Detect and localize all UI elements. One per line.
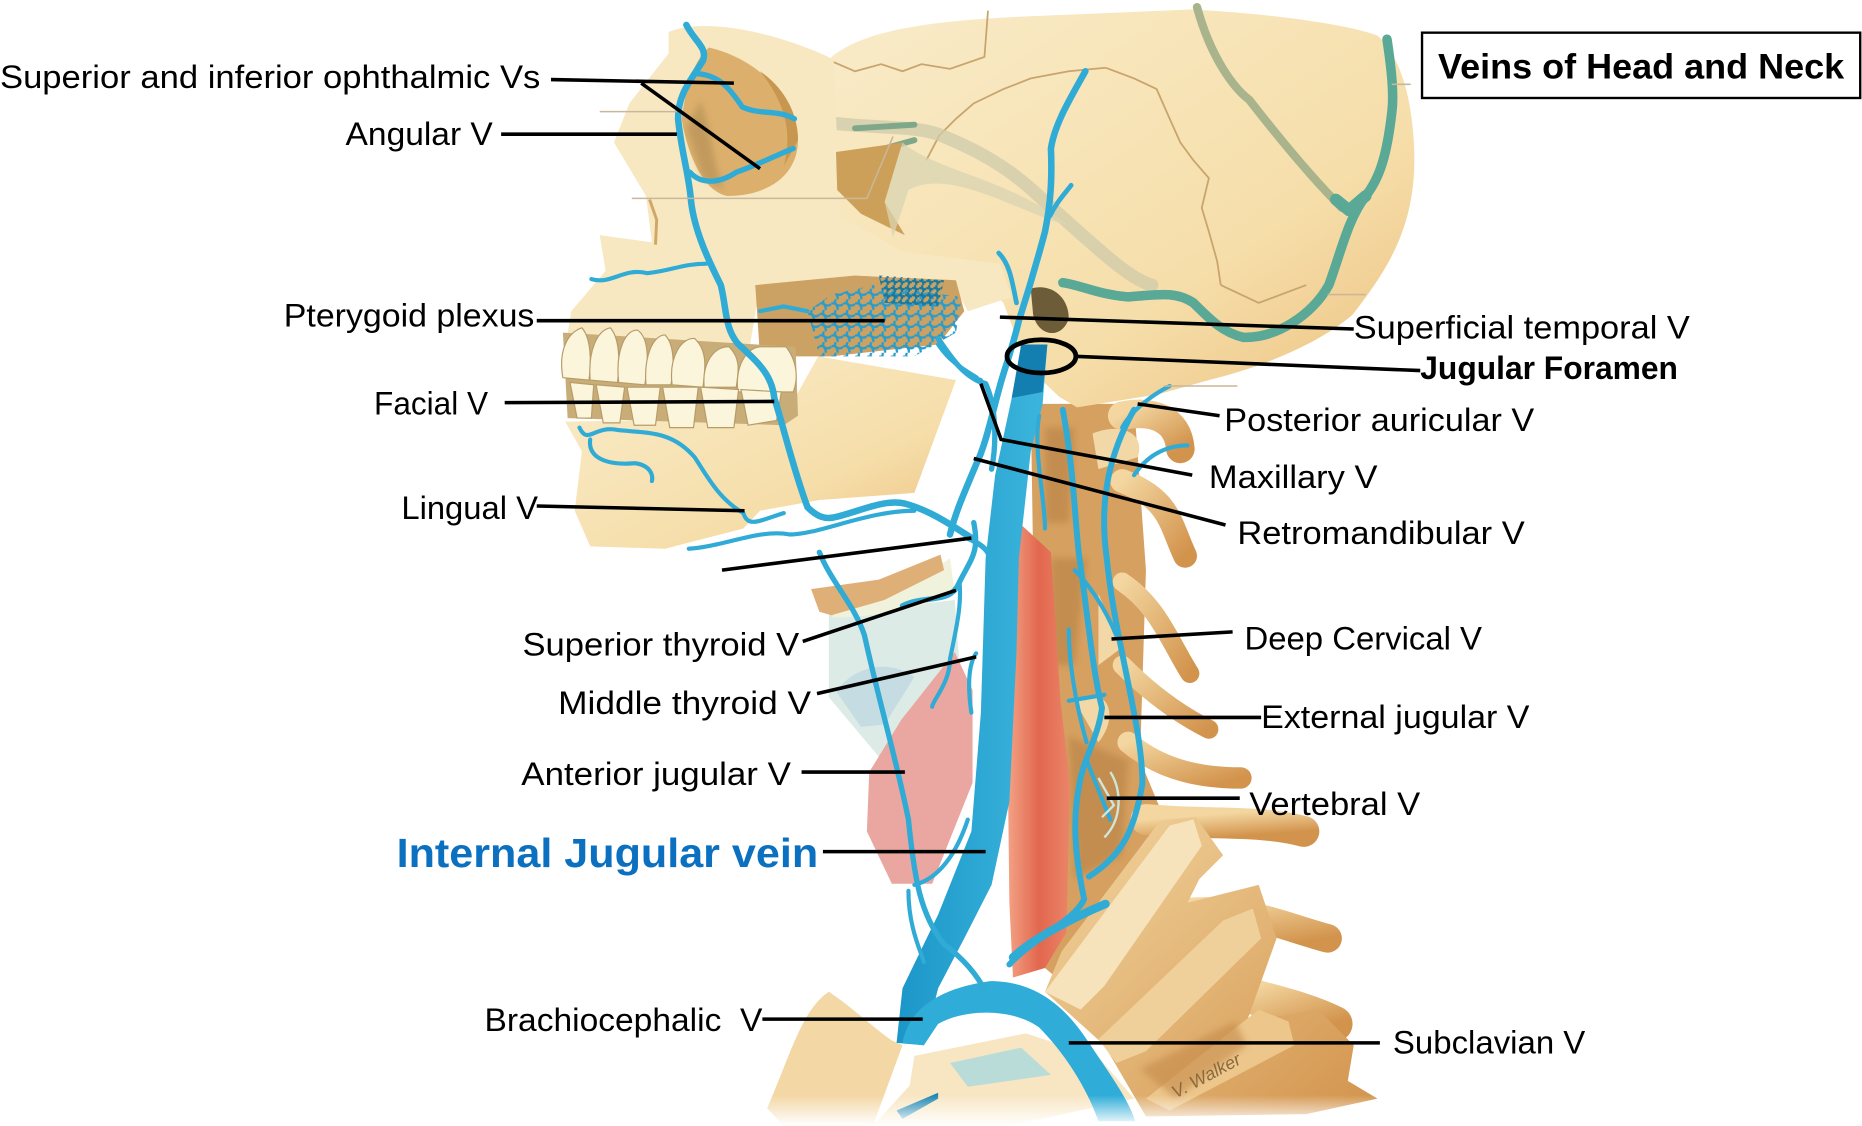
skull cranium <box>819 10 1414 407</box>
label: pterygoid plexus: Pterygoid plexus <box>284 298 534 334</box>
vertebrae and ribs <box>1024 404 1378 1116</box>
ear canal and base of skull <box>1031 287 1069 333</box>
facial and angular veins <box>678 25 974 539</box>
label: facial vein: Facial V <box>374 386 489 422</box>
label: lingual vein <box>401 490 745 526</box>
label: posterior auricular vein: Posterior auricular V <box>1224 402 1535 438</box>
label: subclavian vein: Subclavian V <box>1393 1025 1586 1061</box>
clavicle and sternum <box>767 992 1134 1126</box>
label: maxillary vein: Maxillary V <box>1209 459 1378 495</box>
thyroid gland <box>867 652 973 884</box>
label: lingual vein: Lingual V <box>401 490 539 526</box>
leader: unlabelled line <box>722 538 971 570</box>
label: angular vein: Angular V <box>346 116 493 152</box>
internal jugular vein <box>897 344 1047 1045</box>
fade at bottom edge <box>736 1095 1401 1126</box>
skull face <box>564 26 1012 356</box>
label: jugular foramen with ring marker: Jugular Foramen <box>1420 350 1678 386</box>
label: internal jugular vein: Internal Jugular vein <box>397 830 818 876</box>
mandible <box>565 356 956 549</box>
cranial sinuses <box>836 7 1393 337</box>
vertebral vein loop <box>1098 772 1119 837</box>
label: superficial temporal vein <box>1000 310 1690 346</box>
label: middle thyroid vein: Middle thyroid V <box>558 685 812 721</box>
label: maxillary vein <box>981 384 1378 495</box>
label: vertebral vein: Vertebral V <box>1249 786 1421 822</box>
pterygoid plexus <box>760 276 981 380</box>
label: anterior jugular vein: Anterior jugular V <box>521 756 792 792</box>
jugular foramen dark vein top <box>1012 344 1047 398</box>
skull sutures <box>830 11 1306 303</box>
label: superficial temporal vein: Superficial temporal V <box>1354 310 1690 346</box>
label: external jugular vein: External jugular V <box>1261 699 1530 735</box>
superficial temporal vein <box>950 71 1085 534</box>
muscle: scalene <box>1008 523 1070 978</box>
infratemporal shadow <box>755 276 964 356</box>
label: superior and inferior ophthalmic veins <box>0 59 760 169</box>
illustration: anatomy of skull, neck and veins <box>562 7 1414 1126</box>
lingual and labial veins <box>580 264 914 549</box>
superior thyroid and anterior jugular vein <box>819 552 986 992</box>
label: deep cervical vein: Deep Cervical V <box>1244 621 1483 657</box>
larynx and hyoid <box>811 555 960 757</box>
title box <box>1422 33 1860 98</box>
veins <box>580 25 1188 1121</box>
retromandibular and branches <box>902 339 995 606</box>
label: superior thyroid vein <box>522 590 956 663</box>
signature: V. Walker <box>1168 1049 1245 1102</box>
label: retromandibular vein <box>974 458 1525 551</box>
label: deep cervical vein <box>1112 621 1483 657</box>
label: retromandibular vein: Retromandibular V <box>1237 515 1525 551</box>
external jugular and deep cervical veins <box>1009 410 1102 964</box>
white gap at jaw <box>956 325 995 378</box>
title box: Veins of Head and Neck <box>1438 46 1844 86</box>
label: brachiocephalic vein: Brachiocephalic V <box>484 1002 763 1038</box>
teeth <box>562 328 798 428</box>
label: superior thyroid vein: Superior thyroid V <box>522 627 800 663</box>
nasal aperture edge <box>650 200 657 245</box>
label: superior and inferior ophthalmic veins: Superior and inferior ophthalmic Vs <box>0 59 540 95</box>
bone leader traces <box>600 84 1411 386</box>
label: middle thyroid vein <box>558 657 976 721</box>
ophthalmic veins <box>690 74 794 181</box>
subclavian vein <box>902 981 1135 1121</box>
temporal fossa <box>836 143 905 235</box>
label: jugular foramen with ring marker <box>1007 340 1678 386</box>
orbit <box>682 48 798 196</box>
